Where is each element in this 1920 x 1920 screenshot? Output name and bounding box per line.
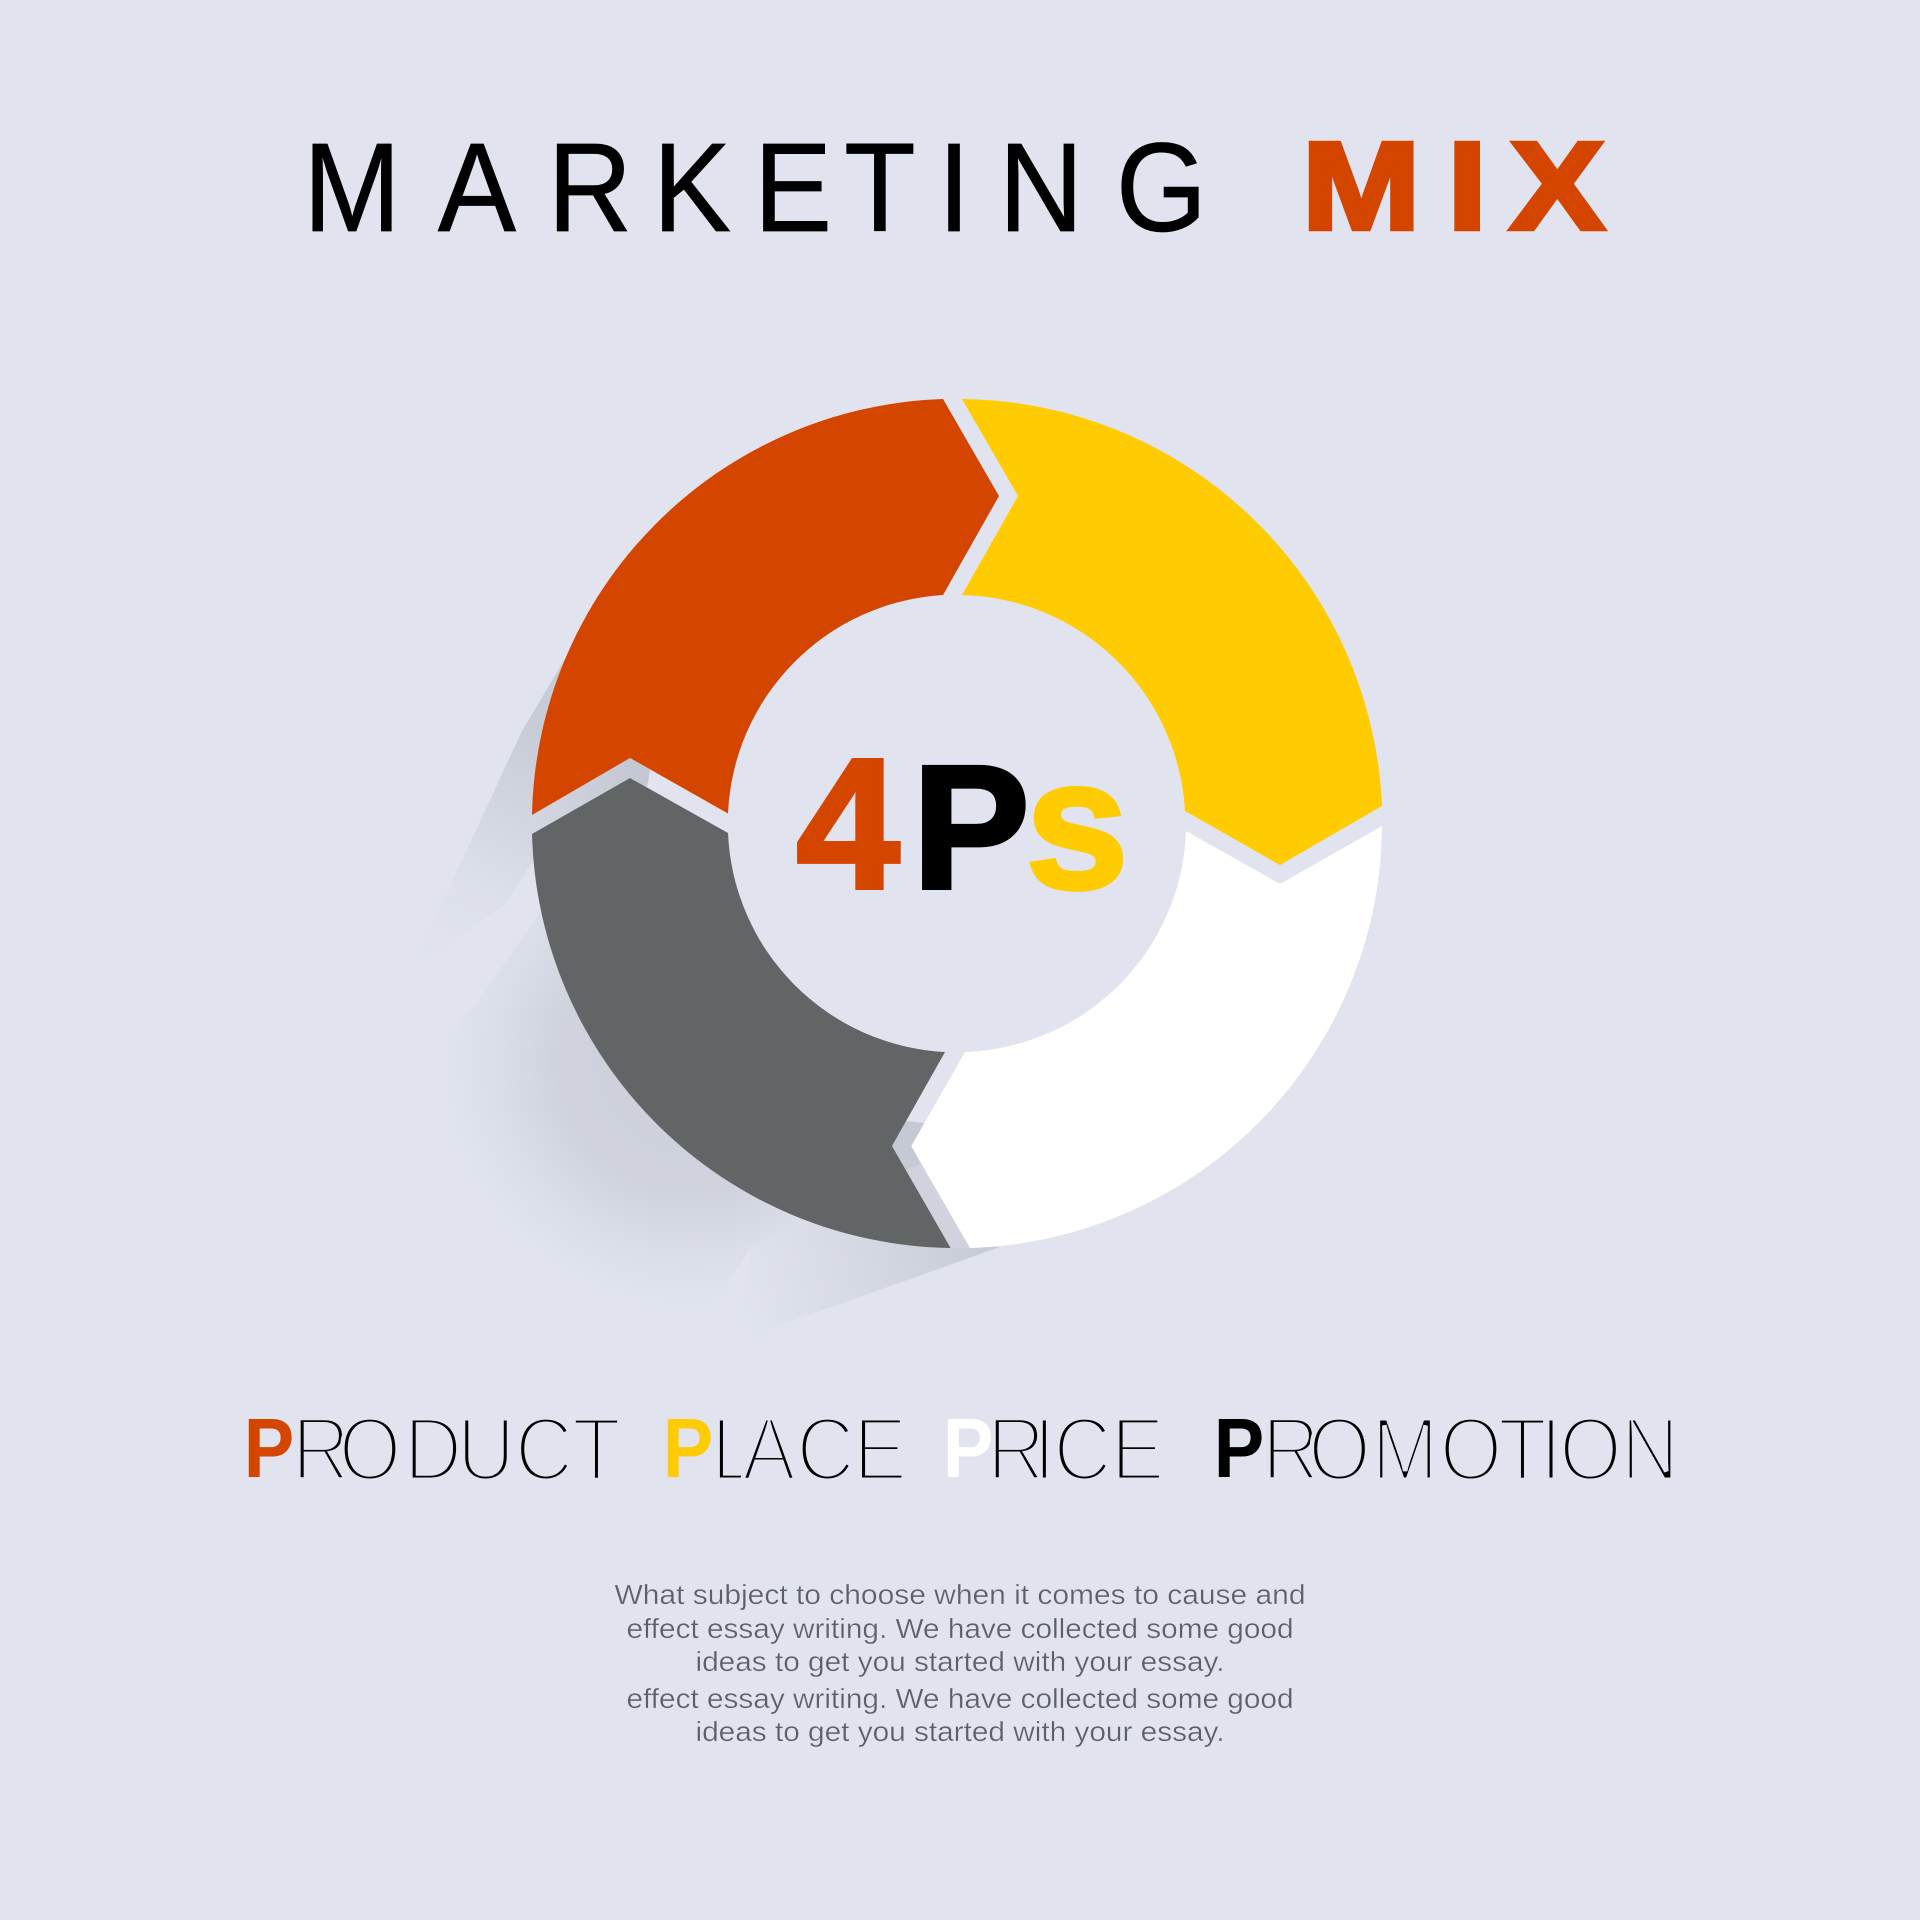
center label: 4Ps: 4 (796, 721, 900, 928)
gap shadow: gray and white, lower (906, 1164, 970, 1248)
donut chart (532, 399, 1382, 1248)
label: promotion: P (1214, 1401, 1264, 1495)
center label: 4Ps: P (912, 730, 1030, 926)
description line 5: ideas to get you started with your essay. (696, 1716, 1224, 1747)
title word: marketing: MARKETING (303, 117, 1207, 258)
segment: place (yellow) (962, 399, 1382, 865)
soft shadow: lower left (505, 943, 790, 1244)
title (303, 117, 1605, 258)
segment: promotion (gray) (532, 778, 951, 1248)
long shadow: bottom (747, 1222, 1000, 1337)
description line 4: effect essay writing. We have collected some good (626, 1683, 1294, 1714)
label: product: RODUCT (292, 1399, 621, 1500)
description line 2: effect essay writing. We have collected some good (626, 1613, 1294, 1644)
label: place: P (663, 1401, 713, 1495)
donut shadows (400, 600, 1000, 1340)
gap shadow: gray and white, upper (892, 1121, 924, 1170)
label: price: RICE (987, 1399, 1165, 1500)
segment: price (white) (911, 826, 1382, 1248)
infographic canvas (248, 140, 1670, 1747)
long shadow: left (412, 600, 600, 968)
gap shadows (532, 758, 970, 1248)
description line 3: ideas to get you started with your essay. (696, 1646, 1224, 1677)
label: place: LACE (711, 1399, 907, 1500)
segment: product (red) (532, 399, 999, 815)
label: promotion: ROMOTION (1262, 1399, 1679, 1500)
description text (614, 1579, 1306, 1747)
center label: 4Ps: s (1025, 721, 1129, 928)
description line 1: What subject to choose when it comes to cause and (614, 1579, 1306, 1610)
title word: mix: MIX (1302, 117, 1605, 256)
gap shadow: red and gray (532, 758, 650, 834)
label: product: P (244, 1401, 294, 1495)
four Ps labels (244, 1399, 1679, 1500)
label: price: P (943, 1401, 993, 1495)
